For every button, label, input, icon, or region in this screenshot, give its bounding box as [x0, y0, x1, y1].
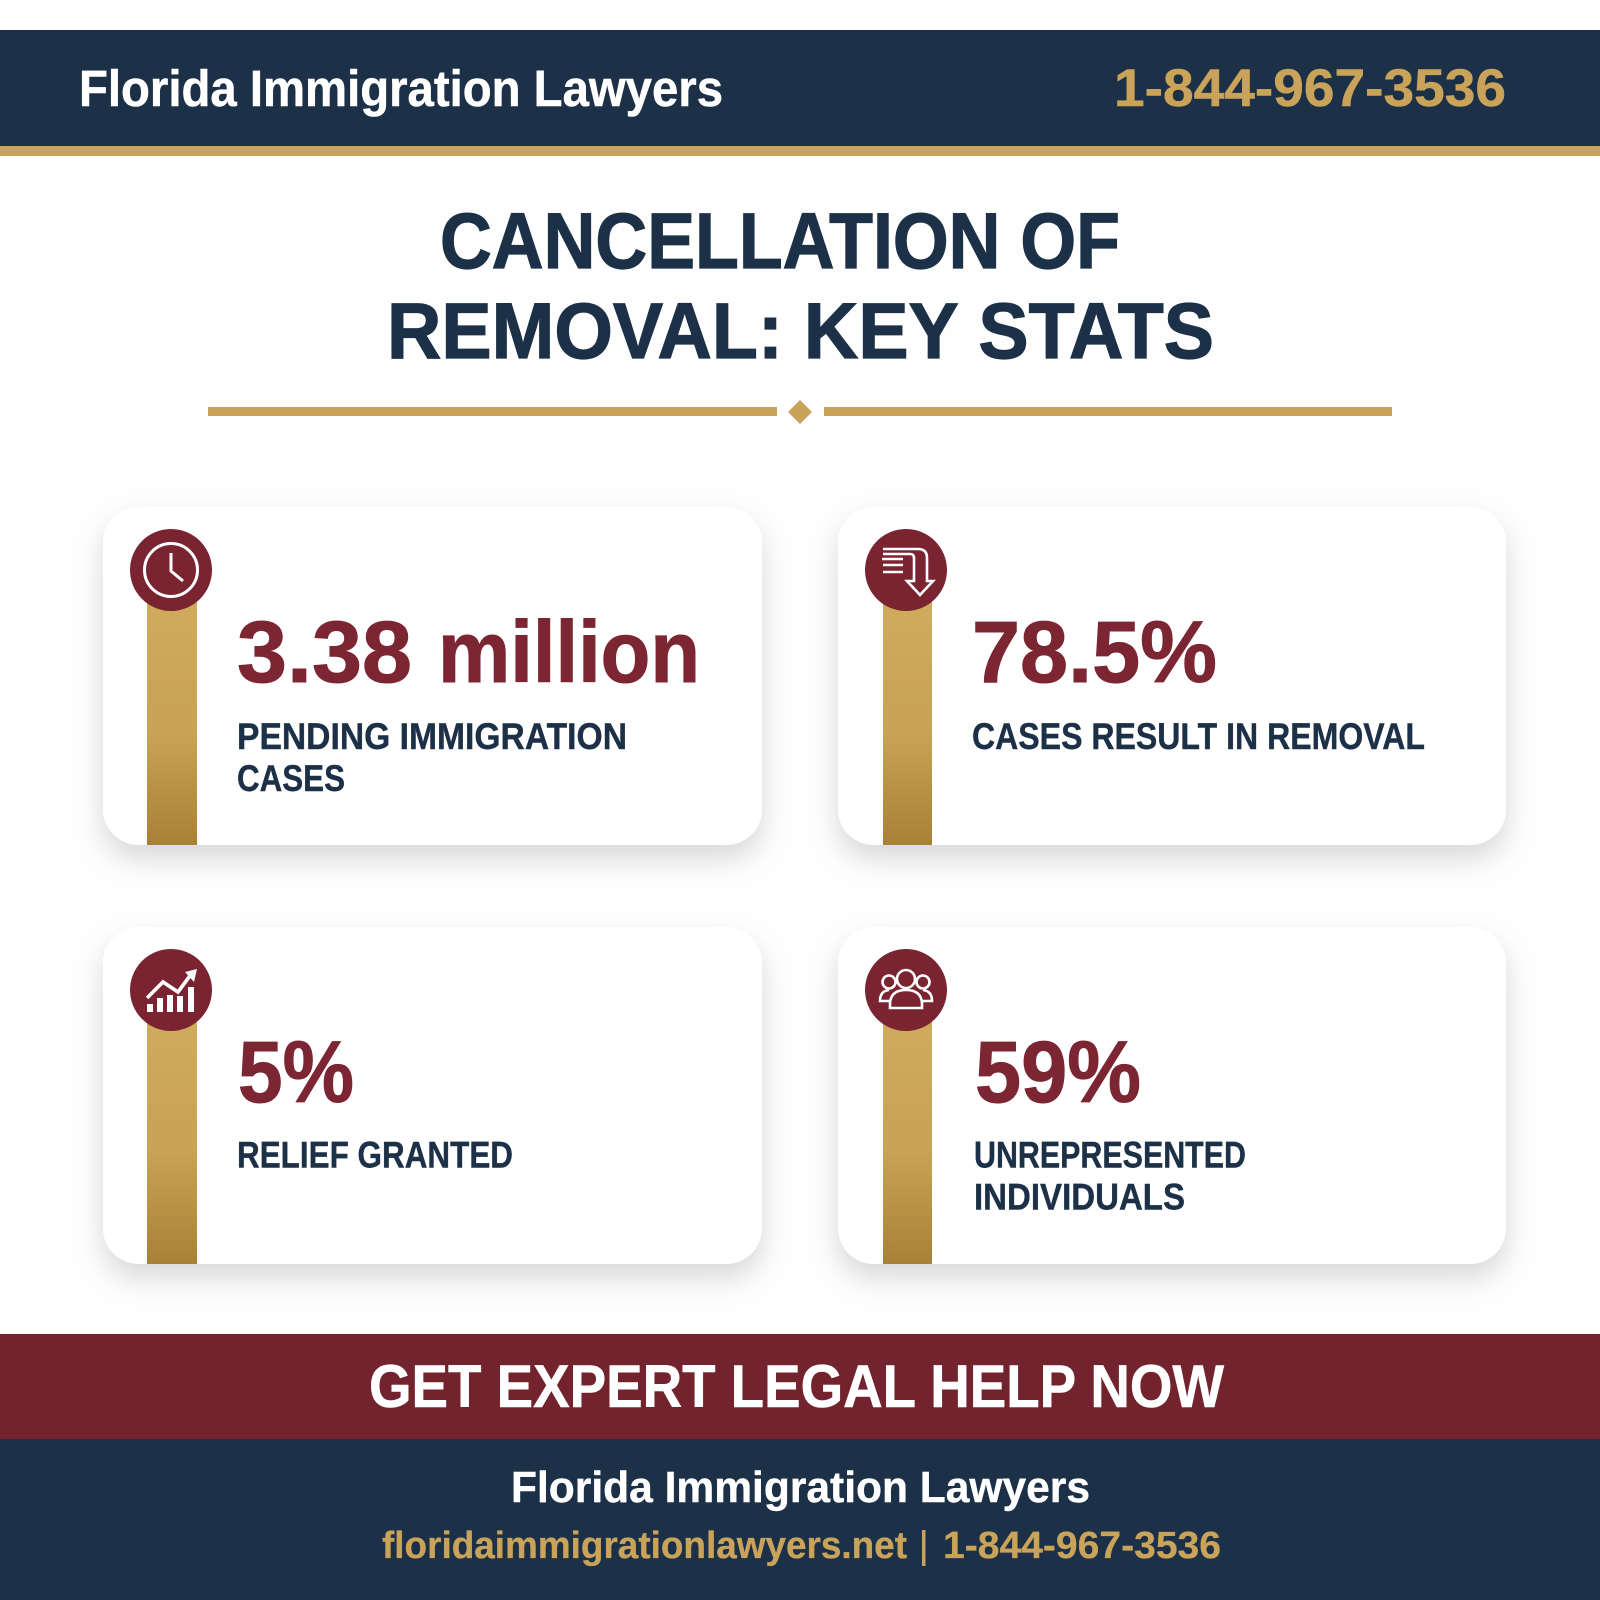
- stat value: million: [438, 604, 700, 701]
- stat value: [237, 604, 700, 701]
- footer contact line: floridaimmigrationlawyers.net: [382, 1525, 907, 1567]
- stat label: CASES: [237, 758, 345, 799]
- stat label: CASES RESULT IN REMOVAL: [972, 716, 1425, 757]
- firm name: Florida Immigration Lawyers: [79, 60, 723, 117]
- stat value: 78.5%: [972, 604, 1217, 701]
- stat label: UNREPRESENTED: [974, 1134, 1246, 1176]
- top header band: [0, 30, 1600, 156]
- footer contact line: [382, 1525, 1221, 1567]
- stat value: 5%: [238, 1024, 354, 1121]
- icon: clock: [130, 529, 212, 611]
- stat label: INDIVIDUALS: [974, 1176, 1185, 1218]
- panel: pending cases: [103, 507, 762, 845]
- footer firm name: Florida Immigration Lawyers: [511, 1463, 1090, 1512]
- stat label: [237, 716, 627, 799]
- icon: group of people: [865, 949, 947, 1031]
- stat label: [974, 1134, 1246, 1218]
- footer band: [0, 1439, 1600, 1600]
- stat value: 3.38: [237, 604, 412, 701]
- panel: relief granted: [103, 927, 762, 1264]
- title: [387, 196, 1214, 375]
- icon: descending list with arrow: [865, 529, 947, 611]
- stat value: 59%: [975, 1024, 1141, 1121]
- panel: unrepresented individuals: [838, 927, 1506, 1264]
- phone number: 1-844-967-3536: [1114, 59, 1506, 118]
- stat label: PENDING IMMIGRATION: [237, 716, 627, 757]
- panel: removal rate: [838, 507, 1506, 845]
- call to action band: [0, 1334, 1600, 1440]
- title: CANCELLATION OF: [440, 196, 1120, 285]
- call to action band: GET EXPERT LEGAL HELP NOW: [369, 1353, 1224, 1420]
- title: REMOVAL: KEY STATS: [387, 286, 1214, 375]
- icon: growth chart: [130, 949, 212, 1031]
- title divider: [208, 400, 1392, 424]
- stat label: RELIEF GRANTED: [237, 1134, 513, 1176]
- footer contact line: 1-844-967-3536: [943, 1525, 1221, 1567]
